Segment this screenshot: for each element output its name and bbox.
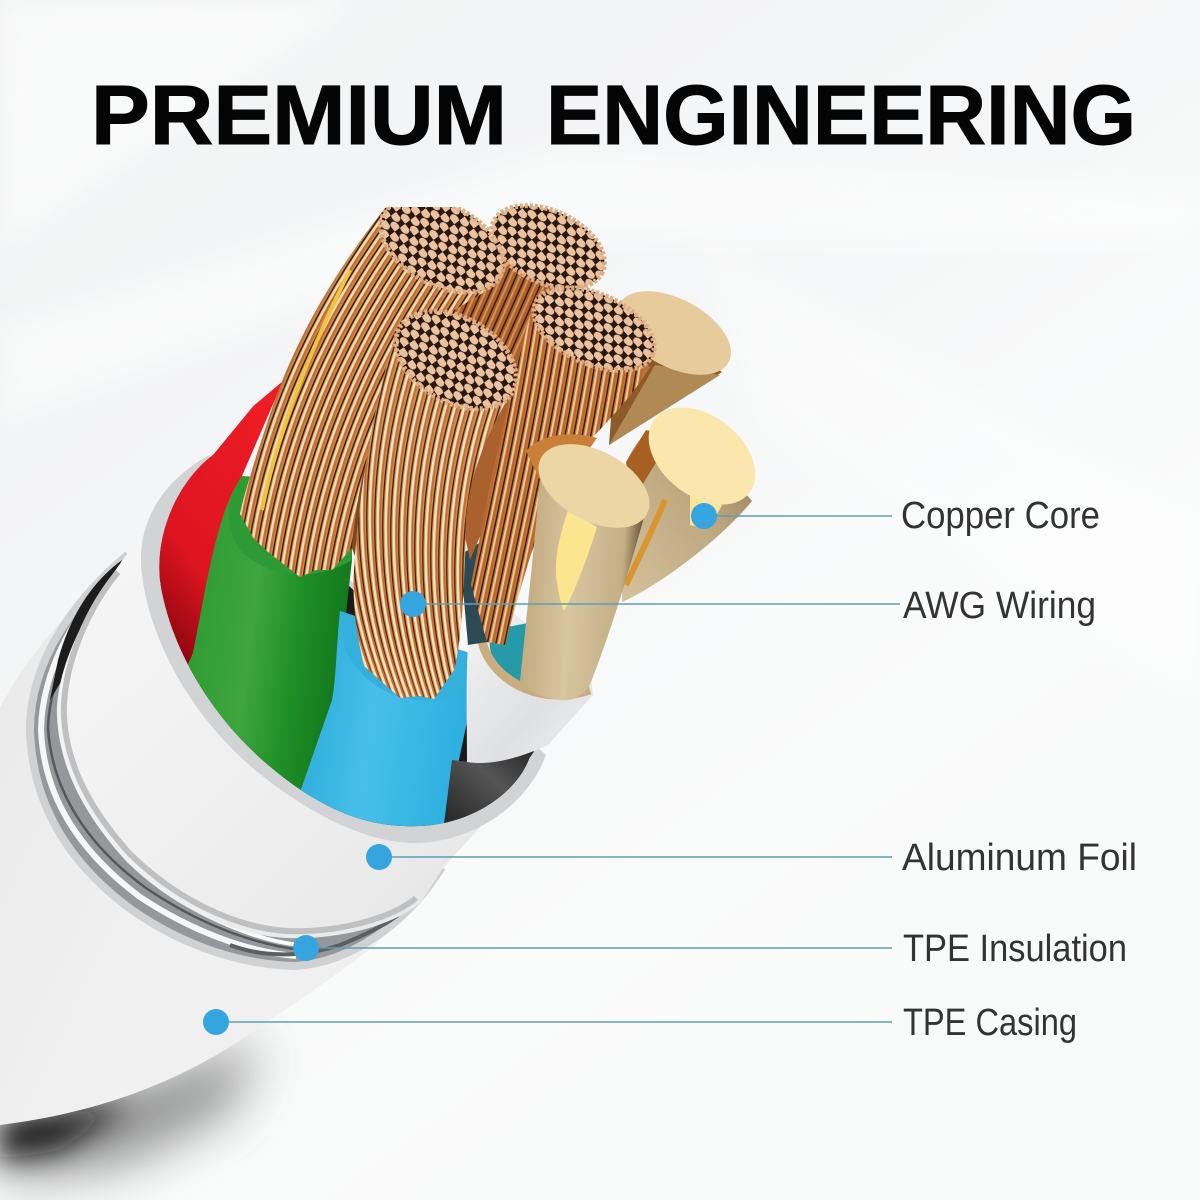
gold solid wire: back: [603, 274, 745, 445]
callout: TPE casing: [203, 1002, 1077, 1044]
cable shadow: [0, 1040, 260, 1178]
callout: TPE casing: TPE Casing: [903, 1002, 1077, 1044]
title: [91, 68, 1136, 162]
callout: aluminum foil: [366, 837, 1137, 879]
TPE casing: [0, 557, 443, 1125]
dark inner foil: [444, 751, 534, 823]
white inner sleeve: [467, 610, 593, 763]
aluminum foil sleeve: [57, 455, 546, 938]
callout: TPE insulation: [293, 928, 1127, 970]
red wire: [159, 382, 282, 680]
callout: AWG wiring: AWG Wiring: [903, 585, 1096, 627]
copper bundle: middle: [471, 285, 656, 645]
gold solid wire: front: [520, 427, 663, 700]
gold solid wire: right: [622, 388, 774, 602]
copper bundle: front: [354, 308, 518, 699]
callout: copper core: Copper Core: [901, 495, 1100, 537]
callout: AWG wiring: [400, 585, 1096, 627]
callout: TPE insulation: TPE Insulation: [903, 928, 1127, 970]
title: ENGINEERING: [546, 68, 1136, 162]
dark gap between bundles: [460, 535, 500, 645]
copper bundle: left: [240, 207, 506, 577]
title: PREMIUM: [91, 68, 507, 162]
blue wire: [298, 611, 471, 841]
copper bundle: back: [352, 203, 607, 560]
callout: aluminum foil: Aluminum Foil: [902, 837, 1137, 879]
coloured inner wires: [148, 381, 540, 841]
silver ring: TPE insulation: [30, 557, 440, 966]
callout: copper core: [691, 495, 1100, 537]
green wire: [180, 476, 352, 812]
